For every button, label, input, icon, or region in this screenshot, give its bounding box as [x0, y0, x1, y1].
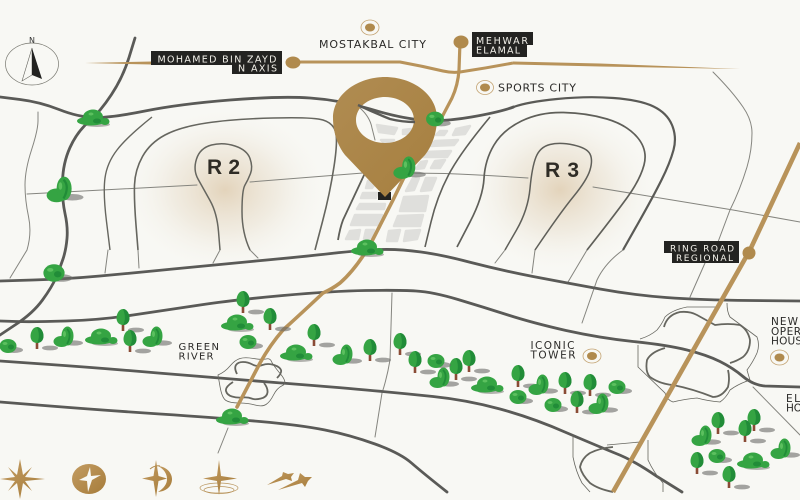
label: Ring Road Regional: RING ROAD [670, 244, 734, 254]
trees: green river belt [0, 291, 632, 414]
hill shading: R3 [460, 105, 660, 275]
gold road: central diagonal [237, 165, 410, 407]
contour road: R2 outer arc [104, 117, 152, 250]
place: Green River [178, 342, 219, 362]
zone label: R2: R2 [207, 156, 240, 179]
location pin [333, 77, 437, 197]
contour road: R3 outer arc [425, 117, 490, 247]
label: Mehwar Elamal: MEHWAR [476, 36, 528, 47]
place: New Opera House [770, 316, 800, 365]
place: Iconic Tower: ICONIC [530, 340, 574, 352]
interchange: opera house [638, 303, 758, 402]
trees: south east grove [690, 409, 800, 489]
project marker base [378, 192, 391, 200]
node: Ring Road Regional [742, 246, 756, 260]
gold road: regional ring road [613, 143, 800, 492]
thin local streets [10, 72, 800, 453]
decorative icon: eight point star [0, 459, 45, 499]
north compass: N [29, 36, 35, 45]
place: Sports City: SPORTS CITY [498, 82, 576, 94]
decorative icon: star in circle [72, 464, 106, 494]
node: Mehwar Elamal [454, 36, 468, 48]
zone label: R3: R3 [545, 159, 579, 182]
place: Green River: RIVER [178, 352, 214, 362]
district building blocks [346, 125, 470, 241]
interchange: green river [218, 358, 285, 406]
place: New Opera House: NEW [771, 316, 799, 328]
road: R3 upper ring [514, 97, 675, 250]
decorative icon: shooting stars [267, 472, 312, 490]
gold road: Mohamed Bin Zayd axis [85, 62, 740, 72]
place: Iconic Tower [530, 340, 601, 363]
road: district west edge [338, 173, 365, 240]
hill shading: R2 [120, 105, 330, 275]
north compass [6, 36, 58, 85]
place: Green River: GREEN [178, 342, 219, 353]
gold road: Mehwar Elamal link [442, 42, 460, 117]
place: partial east label: EL [786, 393, 800, 405]
label: Mohamed Bin Zayd axis: N AXIS [238, 64, 277, 74]
contour road: R3 middle loop [457, 112, 645, 250]
pin hole road [358, 105, 415, 122]
label: Mehwar Elamal [472, 32, 533, 57]
label: Ring Road Regional: REGIONAL [676, 254, 733, 264]
contour road: R3 inner loop [505, 143, 592, 250]
contour road: R2 inner loop [195, 144, 252, 250]
label: Mohamed Bin Zayd axis [151, 51, 282, 74]
decorative icon: star with crescent [142, 460, 172, 497]
road junction bushes [43, 110, 451, 426]
place: partial east label [786, 393, 800, 414]
place: Mostakbal City [319, 20, 426, 51]
contour road: R2 middle loop [134, 118, 336, 250]
label: Ring Road Regional [664, 241, 739, 264]
interchange: south [573, 435, 663, 492]
decorative icon: star over rings [200, 460, 238, 495]
place: Mostakbal City: MOSTAKBAL CITY [319, 38, 426, 51]
node: Mohamed Bin Zayd [286, 56, 300, 68]
label: Mehwar Elamal: ELAMAL [476, 46, 521, 56]
label: Mohamed Bin Zayd axis: MOHAMED BIN ZAYD [158, 54, 276, 66]
place: Iconic Tower: TOWER [530, 350, 576, 362]
